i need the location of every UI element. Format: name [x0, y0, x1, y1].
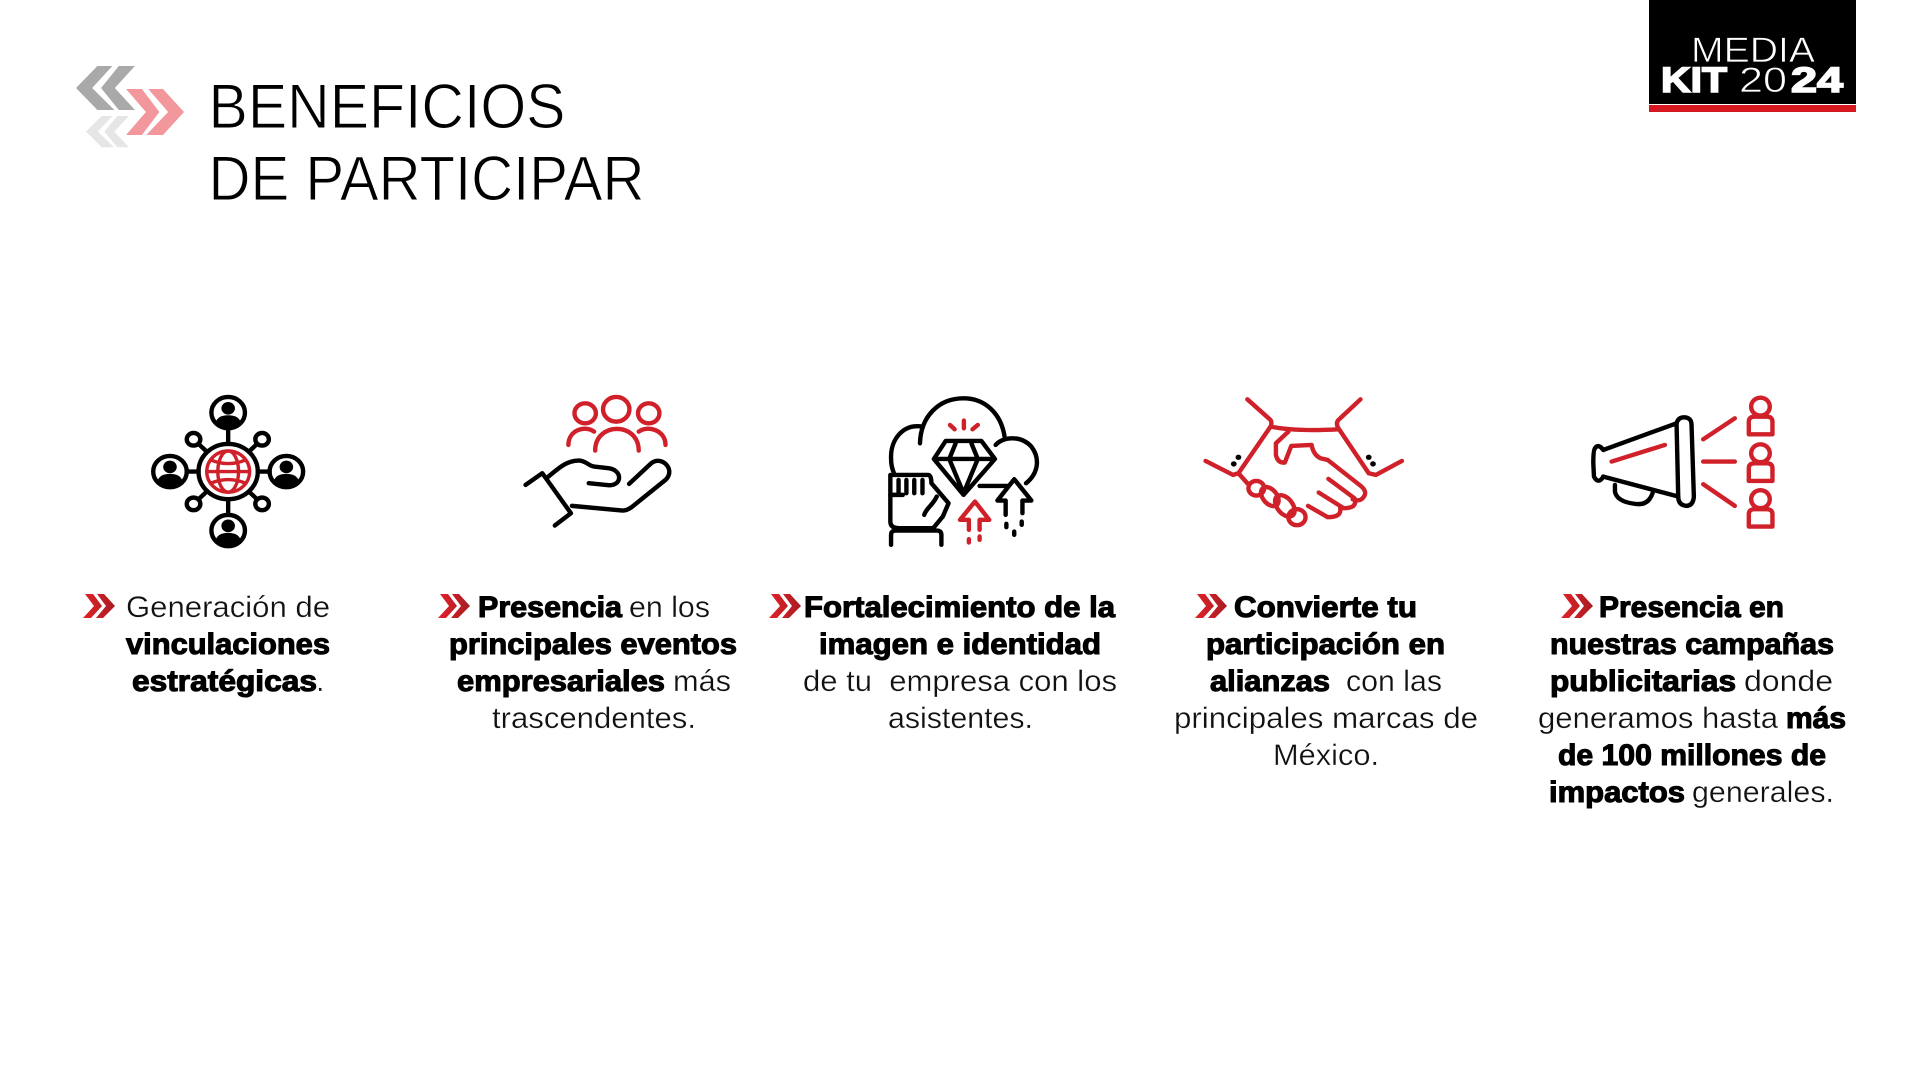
text block: principales marcas de	[1174, 702, 1478, 735]
text block: alianzas	[1210, 665, 1330, 698]
panel: vinculaciones	[83, 397, 330, 698]
text block: participación en	[1206, 628, 1445, 661]
text block: generales.	[1692, 776, 1834, 809]
text block	[1174, 591, 1478, 772]
text block: con las	[1346, 665, 1442, 698]
text block: México.	[1273, 739, 1379, 772]
icon: megaphone and audience	[1593, 398, 1772, 527]
icon: cloud diamond fist	[890, 398, 1037, 545]
logo: media kit 2024: MEDIA	[1691, 31, 1816, 70]
title: BENEFICIOS	[208, 72, 566, 142]
bullet arrow	[1195, 594, 1227, 618]
bullet arrow	[83, 594, 115, 618]
panel: presencia en eventos	[438, 397, 737, 735]
logo: media kit 2024	[1649, 0, 1856, 112]
text block: Presencia en	[1599, 591, 1784, 624]
text block: de 100 millones de	[1558, 739, 1826, 772]
panel: alianzas	[1174, 399, 1478, 772]
text block: Presencia	[478, 591, 622, 624]
logo: media kit 2024: 24	[1791, 61, 1844, 100]
logo: media kit 2024: KIT	[1661, 61, 1727, 100]
panel: campañas publicitarias	[1538, 398, 1846, 809]
bullet arrow	[438, 594, 470, 618]
text block: publicitarias	[1550, 665, 1736, 698]
title: DE PARTICIPAR	[208, 144, 644, 214]
text block: .	[316, 665, 324, 698]
text block: Generación de	[126, 591, 330, 624]
text block: en los	[629, 591, 710, 624]
text block: vinculaciones	[126, 628, 330, 661]
text block: de tu empresa con los	[803, 665, 1117, 698]
icon: hand holding people	[526, 397, 669, 526]
title	[208, 72, 644, 214]
icon: handshake	[1206, 399, 1402, 525]
text block	[803, 591, 1117, 735]
text block: impactos	[1549, 776, 1685, 809]
bullet arrow	[1561, 594, 1593, 618]
text block	[449, 591, 737, 735]
bullet arrow	[769, 594, 801, 618]
text block: empresariales	[457, 665, 665, 698]
text block	[126, 591, 330, 698]
text block: más	[673, 665, 731, 698]
text block: principales eventos	[449, 628, 737, 661]
text block: asistentes.	[888, 702, 1033, 735]
text block: estratégicas	[132, 665, 317, 698]
panel: fortalecimiento	[769, 398, 1117, 735]
text block: nuestras campañas	[1550, 628, 1834, 661]
text block: Convierte tu	[1234, 591, 1417, 624]
title chevrons icon	[76, 66, 184, 147]
text block: más	[1786, 702, 1846, 735]
text block: donde	[1744, 665, 1833, 698]
text block: trascendentes.	[492, 702, 696, 735]
icon: network globe	[153, 397, 303, 546]
text block	[1538, 591, 1846, 809]
text block: generamos hasta	[1538, 702, 1778, 735]
logo: media kit 2024: 20	[1739, 61, 1787, 100]
text block: Fortalecimiento de la	[804, 591, 1115, 624]
text block: imagen e identidad	[819, 628, 1101, 661]
